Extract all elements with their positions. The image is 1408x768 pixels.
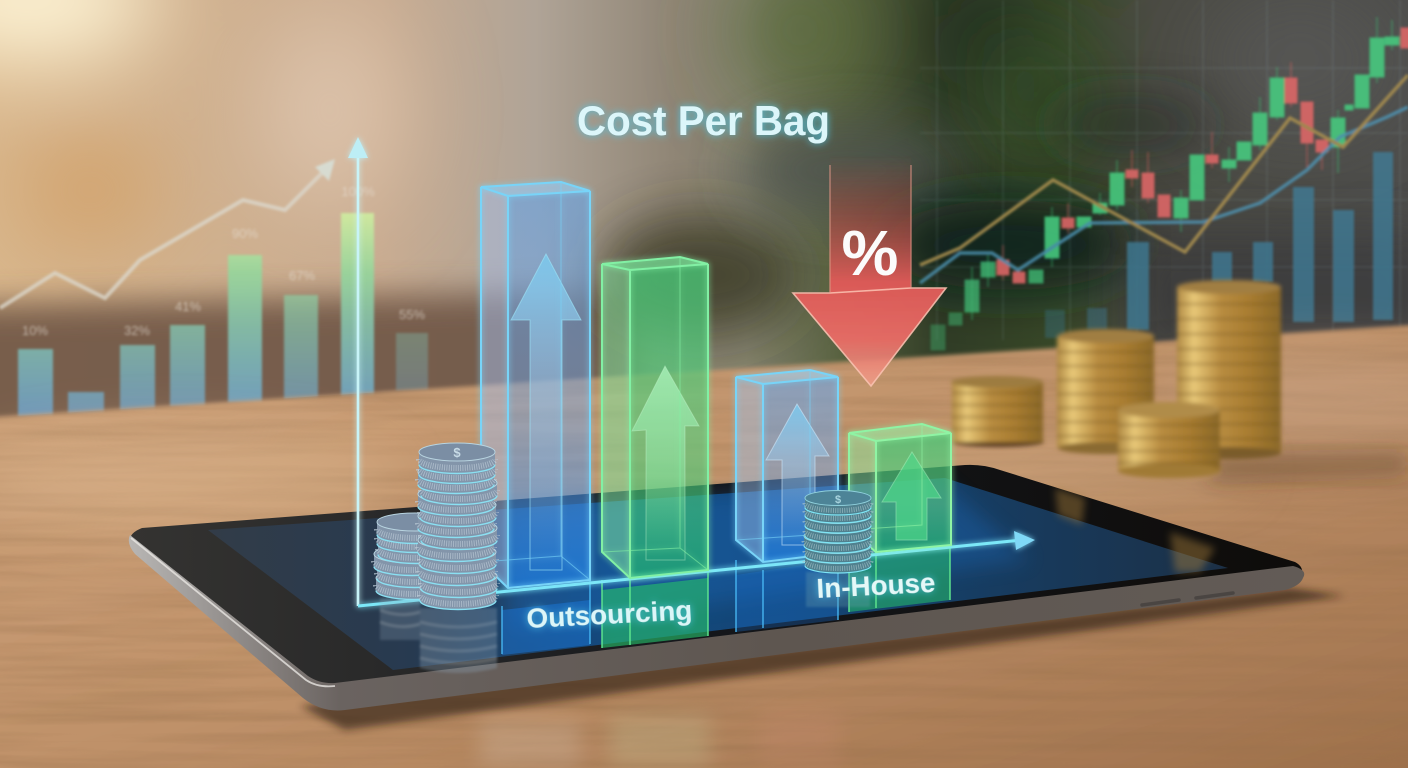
gold coin stacks [951, 280, 1408, 482]
blue arrow large [511, 254, 581, 570]
background right market chart [920, 0, 1408, 350]
gold stack tall [1177, 280, 1281, 459]
background left bar chart: 90% [232, 226, 258, 241]
table reflections [480, 710, 840, 768]
gold stack small [951, 376, 1044, 447]
green bar in-house [849, 424, 951, 552]
background left bar chart [18, 184, 428, 417]
background left bar chart: 10% [22, 323, 48, 338]
background left bar chart: 55% [399, 307, 425, 322]
blurred background wall [0, 0, 1408, 450]
background left trend line arrow [0, 159, 335, 308]
tablet side buttons [1142, 593, 1233, 605]
coin reflections [380, 572, 870, 673]
gold reflections on tablet bezel [1055, 488, 1215, 572]
title: Cost Per Bag [577, 97, 830, 144]
coin stack tall [418, 443, 497, 610]
dollar mark on coin: $ [453, 445, 461, 460]
bar reflections on screen [502, 545, 950, 655]
coin stack in-house: $ [835, 494, 841, 506]
label: in-house: In-House [816, 567, 936, 604]
green bar outsourcing [602, 257, 708, 578]
coin stack in-house [804, 490, 871, 573]
blue bar outsourcing [481, 182, 590, 588]
tablet screen [208, 478, 1228, 670]
background left bar chart: 32% [124, 323, 150, 338]
green arrow small [882, 452, 941, 540]
gold stack medium [1057, 329, 1154, 454]
tablet rim [129, 535, 1304, 710]
chart axes [348, 137, 1035, 606]
gold coin shadow [1210, 452, 1408, 482]
background left bar chart: 41% [175, 299, 201, 314]
background left bar chart: 67% [289, 268, 315, 283]
green arrow large [632, 366, 699, 560]
wooden table [0, 300, 1408, 768]
percent sign: % [842, 217, 898, 289]
background left bar chart: 100% [341, 184, 375, 199]
tablet device [129, 465, 1345, 730]
coin stack small left [374, 513, 454, 600]
label: outsourcing: Outsourcing [526, 594, 693, 634]
blue arrow small [766, 404, 829, 545]
tablet body [130, 465, 1302, 701]
gold stack front [1118, 402, 1220, 478]
blue bar in-house [736, 370, 838, 562]
red down arrow [793, 155, 946, 386]
